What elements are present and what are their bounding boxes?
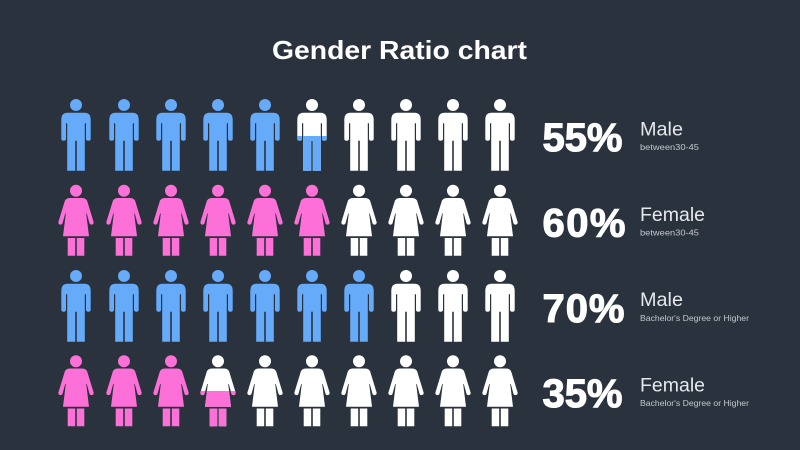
row 3 percentage: 70% bbox=[542, 287, 624, 331]
row 1 label: Male bbox=[640, 118, 683, 140]
row 4: female 35% icons bbox=[58, 355, 518, 426]
row 4 label: Female bbox=[640, 374, 705, 396]
row 2 sublabel: between30-45 bbox=[640, 228, 700, 238]
row 1 sublabel: between30-45 bbox=[640, 143, 700, 152]
title: Gender Ratio chart bbox=[272, 35, 527, 65]
row 3: male 70% icons bbox=[61, 270, 515, 342]
row 4 sublabel: Bachelor's Degree or Higher bbox=[640, 399, 749, 408]
row 2 label: Female bbox=[640, 204, 705, 226]
row 4 percentage: 35% bbox=[542, 372, 622, 416]
row 3 sublabel: Bachelor's Degree or Higher bbox=[640, 314, 749, 323]
row 3 label: Male bbox=[640, 289, 683, 311]
row 2 percentage: 60% bbox=[542, 202, 626, 246]
row 2: female 60% icons bbox=[58, 185, 518, 256]
row 1: male 55% icons bbox=[61, 99, 515, 171]
row 1 percentage: 55% bbox=[542, 116, 622, 160]
